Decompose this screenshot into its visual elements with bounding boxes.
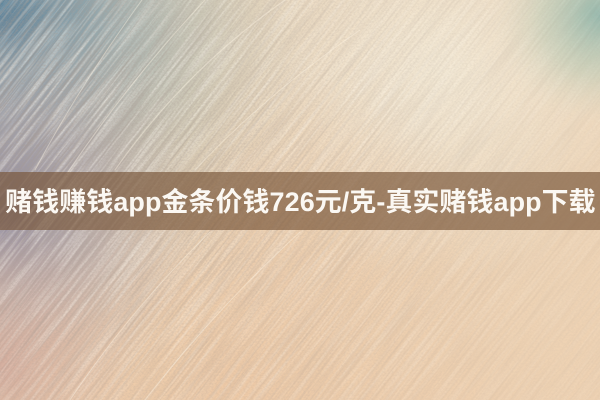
title: 赌钱赚钱app金条价钱726元/克-真实赌钱app下载 (5, 187, 596, 217)
title band (0, 172, 600, 230)
